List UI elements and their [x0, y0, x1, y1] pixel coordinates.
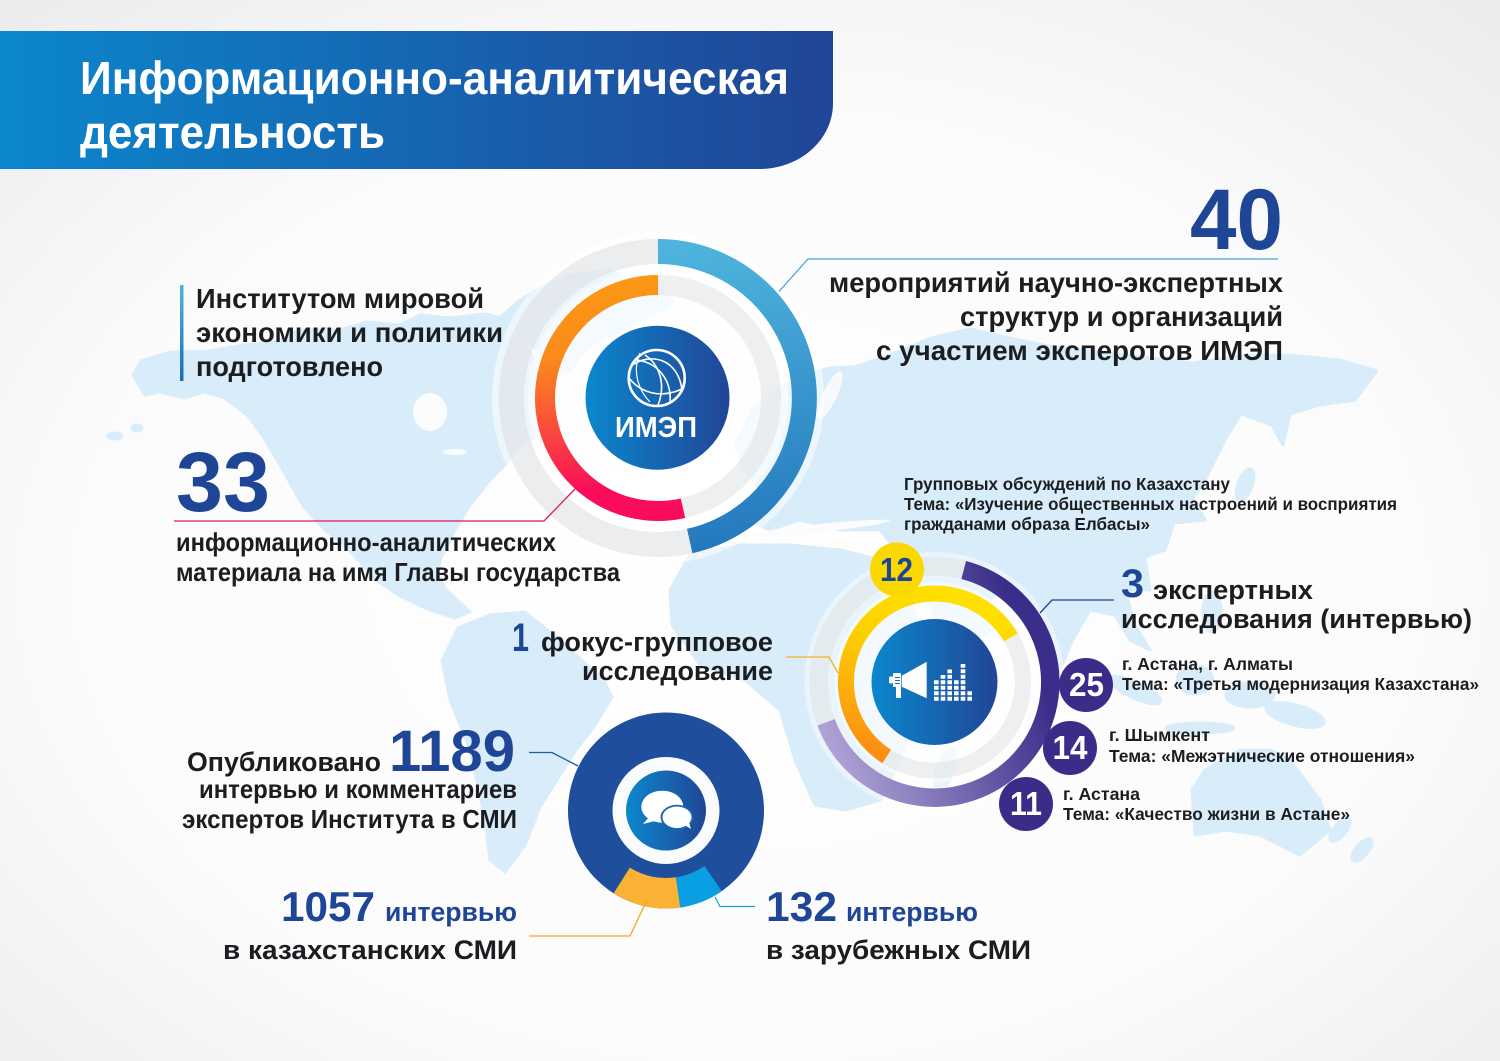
- callout: 40 events: с участием эксперотов ИМЭП: [876, 335, 1283, 366]
- item: 11 interviews: г. Астана: [1063, 784, 1140, 804]
- chart: IMEP publications ring: [492, 232, 824, 564]
- callout: 3 expert studies: 3: [1121, 562, 1144, 606]
- callout: 1057 Kazakhstan interviews: 1057: [281, 883, 375, 930]
- callout: 1189 published: 1189: [389, 719, 515, 784]
- segment: foreign media: [676, 866, 722, 908]
- chart: media donut: [568, 712, 764, 909]
- chart: research ring: [804, 552, 1064, 812]
- title: Информационно-аналитическая: [80, 52, 789, 104]
- text block: group discussions: гражданами образа Елбасы»: [904, 514, 1150, 534]
- arc: 33 materials: [545, 285, 683, 511]
- text block: institute prepared: Институтом мировой: [196, 283, 484, 314]
- callout: 132 foreign interviews: [715, 883, 1031, 965]
- logo: IMEP: [586, 326, 730, 470]
- item: 11 interviews: 11: [1010, 785, 1042, 822]
- text block: group discussions: Тема: «Изучение общественных настроений и восприятия: [904, 494, 1397, 514]
- segment: Kazakhstan media: [614, 868, 680, 909]
- item: 14 interviews: Тема: «Межэтнические отношения»: [1109, 746, 1415, 766]
- callout: 1189 published: интервью и комментариев: [199, 774, 517, 804]
- item: 25 interviews: 25: [1069, 666, 1104, 703]
- callout: 33 materials: материала на имя Главы государства: [176, 557, 620, 587]
- callout: 1 focus group: исследование: [582, 656, 773, 686]
- callout: 1057 Kazakhstan interviews: [223, 883, 647, 965]
- callout: 1189 published: Опубликовано: [187, 747, 381, 777]
- callout: 33 materials: информационно-аналитических: [176, 527, 556, 557]
- callout: 1 focus group: [512, 616, 838, 686]
- callout: 1057 Kazakhstan interviews: интервью: [385, 897, 517, 927]
- callout: 132 foreign interviews: интервью: [846, 897, 978, 927]
- item: 25 interviews: [1059, 654, 1479, 712]
- arc: focus groups: [846, 593, 1011, 756]
- item: 14 interviews: [1043, 721, 1415, 775]
- callout: 1189 published: [182, 719, 578, 834]
- callout: 40 events: структур и организаций: [960, 301, 1283, 332]
- logo: IMEP: ИМЭП: [615, 412, 697, 444]
- text block: institute prepared: подготовлено: [196, 351, 383, 382]
- callout: 1189 published: экспертов Института в СМИ: [182, 804, 517, 834]
- callout: 132 foreign interviews: в зарубежных СМИ: [766, 935, 1031, 965]
- text block: institute prepared: экономики и политики: [196, 317, 503, 348]
- title: [80, 52, 789, 158]
- callout: 40 events: мероприятий научно-экспертных: [829, 267, 1283, 298]
- item: 14 interviews: 14: [1052, 729, 1088, 766]
- arc: 40 events: [658, 252, 804, 541]
- item: 11 interviews: [999, 777, 1350, 831]
- callout: 3 expert studies: экспертных: [1153, 575, 1313, 605]
- header banner: [0, 31, 833, 169]
- arc: expert interviews: [826, 570, 1050, 798]
- badge: 12 group discussions: 12: [880, 551, 913, 588]
- callout: 3 expert studies: [1040, 562, 1472, 634]
- world map background: [108, 270, 1377, 872]
- text block: group discussions: [904, 474, 1397, 534]
- callout: 40 events: [779, 172, 1283, 366]
- callout: 3 expert studies: исследования (интервью): [1121, 604, 1472, 634]
- callout: 40 events: 40: [1190, 172, 1283, 268]
- callout: 33 materials: [174, 435, 620, 587]
- item: 25 interviews: г. Астана, г. Алматы: [1122, 654, 1293, 674]
- item: 25 interviews: Тема: «Третья модернизация Казахстана»: [1122, 674, 1479, 694]
- icon: chat bubbles: [626, 770, 706, 850]
- callout: 1057 Kazakhstan interviews: в казахстанских СМИ: [223, 935, 517, 965]
- callout: 33 materials: 33: [176, 435, 270, 529]
- badge: 12 group discussions: [870, 542, 924, 596]
- icon: megaphone and equalizer: [872, 619, 998, 745]
- title: деятельность: [80, 106, 385, 158]
- callout: 132 foreign interviews: 132: [766, 883, 837, 930]
- text block: institute prepared: [180, 283, 503, 382]
- text block: group discussions: Групповых обсуждений по Казахстану: [904, 474, 1230, 494]
- callout: 1 focus group: 1: [512, 616, 529, 660]
- item: 11 interviews: Тема: «Качество жизни в Астане»: [1063, 804, 1350, 824]
- callout: 1 focus group: фокус-групповое: [541, 627, 773, 657]
- item: 14 interviews: г. Шымкент: [1109, 725, 1210, 745]
